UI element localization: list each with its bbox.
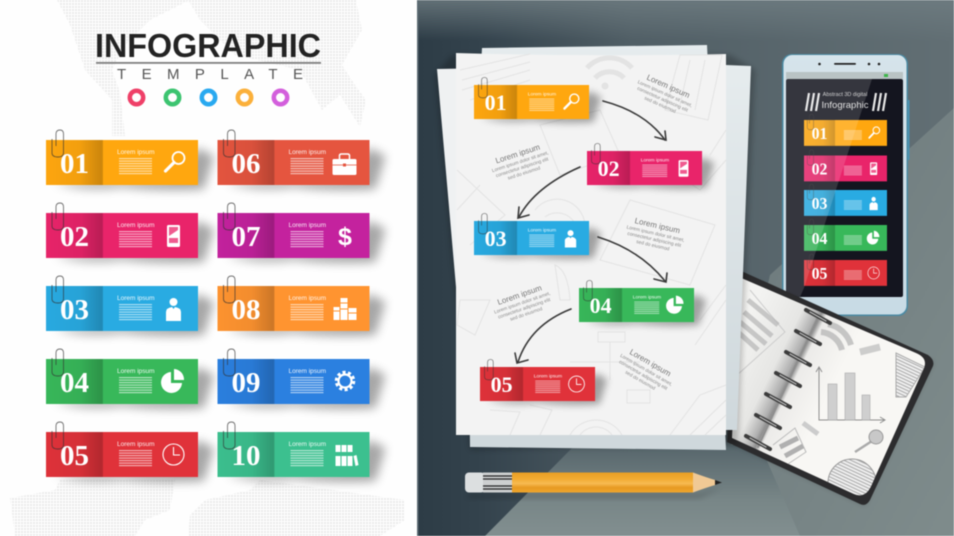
notebook [725,270,933,507]
paper text block 5: consectetur adipiscing elit [618,359,669,392]
phone screen heading [806,92,886,111]
paper doodles [457,54,726,435]
phone status bar [786,72,903,79]
card 01: 01 [60,148,89,180]
arrow 04 to 05 [515,309,571,363]
paper text block 4: Lorem ipsum [496,283,543,307]
decorative colored rings [130,91,287,104]
left panel background [0,0,417,536]
paper text block 3: sed do eiusmod [636,239,670,253]
notebook hatched circle [827,458,876,496]
paper card 02: 02 [598,156,620,181]
paper card 03: 03 [485,226,507,251]
title [95,27,321,83]
paper text block 1: consectetur adipiscing elit [636,86,689,114]
phone screen heading: Abstract 3D digital [823,92,867,98]
card 06 [218,130,386,190]
arrow 02 to 03 [518,167,580,218]
phone card 05: 05 [812,265,827,283]
title: INFOGRAPHIC [95,27,321,64]
card 07: Lorem ipsum [288,222,326,229]
card 10 [218,422,386,482]
paper text block 3: Lorem ipsum dolor sit amet, [626,224,685,244]
phone card 01 [804,114,887,146]
paper text block 2 [488,141,553,186]
card 05: Lorem ipsum [117,441,155,448]
paper card 05 [480,359,607,405]
card 01: Lorem ipsum [117,149,155,156]
card 03 [46,276,214,336]
arrow 01 to 02 [603,101,666,140]
paper text block 5: Lorem ipsum dolor sit amet, [619,353,673,388]
phone screen glare [786,79,872,297]
phone card 04 [804,219,887,251]
back sheet top [468,45,726,450]
paper text block 3: consectetur adipiscing elit [627,231,682,249]
paper text block 5: sed do eiusmod [624,370,656,392]
card 09: 09 [232,367,260,399]
paper text block 5 [613,344,678,398]
card 02: Lorem ipsum [117,222,155,229]
paper text block 5: Lorem ipsum [628,347,673,379]
paper card 01: 01 [485,90,507,115]
card 08: Lorem ipsum [288,295,326,302]
phone card 03: 03 [812,195,827,213]
paper text block 1: Lorem ipsum [645,73,692,100]
card 04 [46,349,214,409]
paper card 05: 05 [491,372,513,397]
arrow 03 to 04 [598,237,667,282]
paper text block 1: sed do eiusmod [643,96,677,115]
phone card 01: 01 [812,125,827,143]
card 09: Lorem ipsum [288,368,326,375]
paper text block 1 [632,70,697,120]
card 07: 07 [232,221,260,253]
paper card 04 [579,280,706,326]
card 04: 04 [60,367,89,399]
card 09 [218,349,386,409]
paper card 04: Lorem ipsum [633,295,661,301]
card 06: 06 [232,148,260,180]
card 03: 03 [60,294,89,326]
card 02: 02 [60,221,89,253]
phone card 05 [804,254,887,286]
paper card 05: Lorem ipsum [534,374,562,380]
card 06: Lorem ipsum [288,149,326,156]
phone card 02 [804,150,887,181]
phone screen [786,79,903,297]
front sheet [456,53,726,435]
paper text block 2: Lorem ipsum dolor sit amet, [491,150,549,174]
card 02 [46,203,214,263]
phone screen heading: Infographic [821,100,869,111]
card 07: $ [338,223,352,251]
card 10: 10 [232,440,260,472]
world map dots, bottom [10,480,405,536]
card 05 [46,422,214,482]
paper card 02 [587,143,714,189]
paper card 01: Lorem ipsum [528,92,556,98]
paper card 03: Lorem ipsum [528,228,556,234]
phone card 04: 04 [812,230,827,248]
paper text block 2: Lorem ipsum [494,142,541,165]
card 03: Lorem ipsum [117,295,155,302]
paper text block 4: consectetur adipiscing elit [497,297,552,321]
paper stack [435,45,755,450]
world map dots, top [57,0,366,136]
right panel background [417,0,954,536]
paper text block 4: Lorem ipsum dolor sit amet, [493,291,551,316]
notebook spiral rings [746,310,830,449]
phone card 02: 02 [812,160,827,179]
card 08 [218,276,386,336]
notebook bar chart [828,373,870,420]
card 07 [218,203,386,263]
paper card 02: Lorem ipsum [641,158,669,164]
paper card 03 [474,213,601,259]
card 04: Lorem ipsum [117,368,155,375]
paper text block 3 [623,215,687,255]
smartphone [782,54,910,316]
paper text block 1: Lorem ipsum dolor sit amet, [637,79,693,109]
pencil [465,472,722,498]
paper text block 2: sed do eiusmod [507,165,541,182]
paper card 04: 04 [590,293,612,318]
paper card 01 [474,77,601,123]
card 01 [46,130,214,190]
notebook doodles [736,290,925,507]
card 05: 05 [60,440,89,472]
subtitle: TEMPLATE [117,66,303,83]
card 10: Lorem ipsum [288,441,326,448]
phone speaker and camera [818,63,880,65]
paper text block 4 [490,281,555,327]
paper text block 4: sed do eiusmod [509,306,544,323]
phone card 03 [804,184,887,216]
paper text block 2: consectetur adipiscing elit [495,156,550,179]
back sheet left [437,66,600,425]
card 08: 08 [232,294,260,326]
back sheet right [700,64,751,430]
paper text block 3: Lorem ipsum [634,216,681,235]
